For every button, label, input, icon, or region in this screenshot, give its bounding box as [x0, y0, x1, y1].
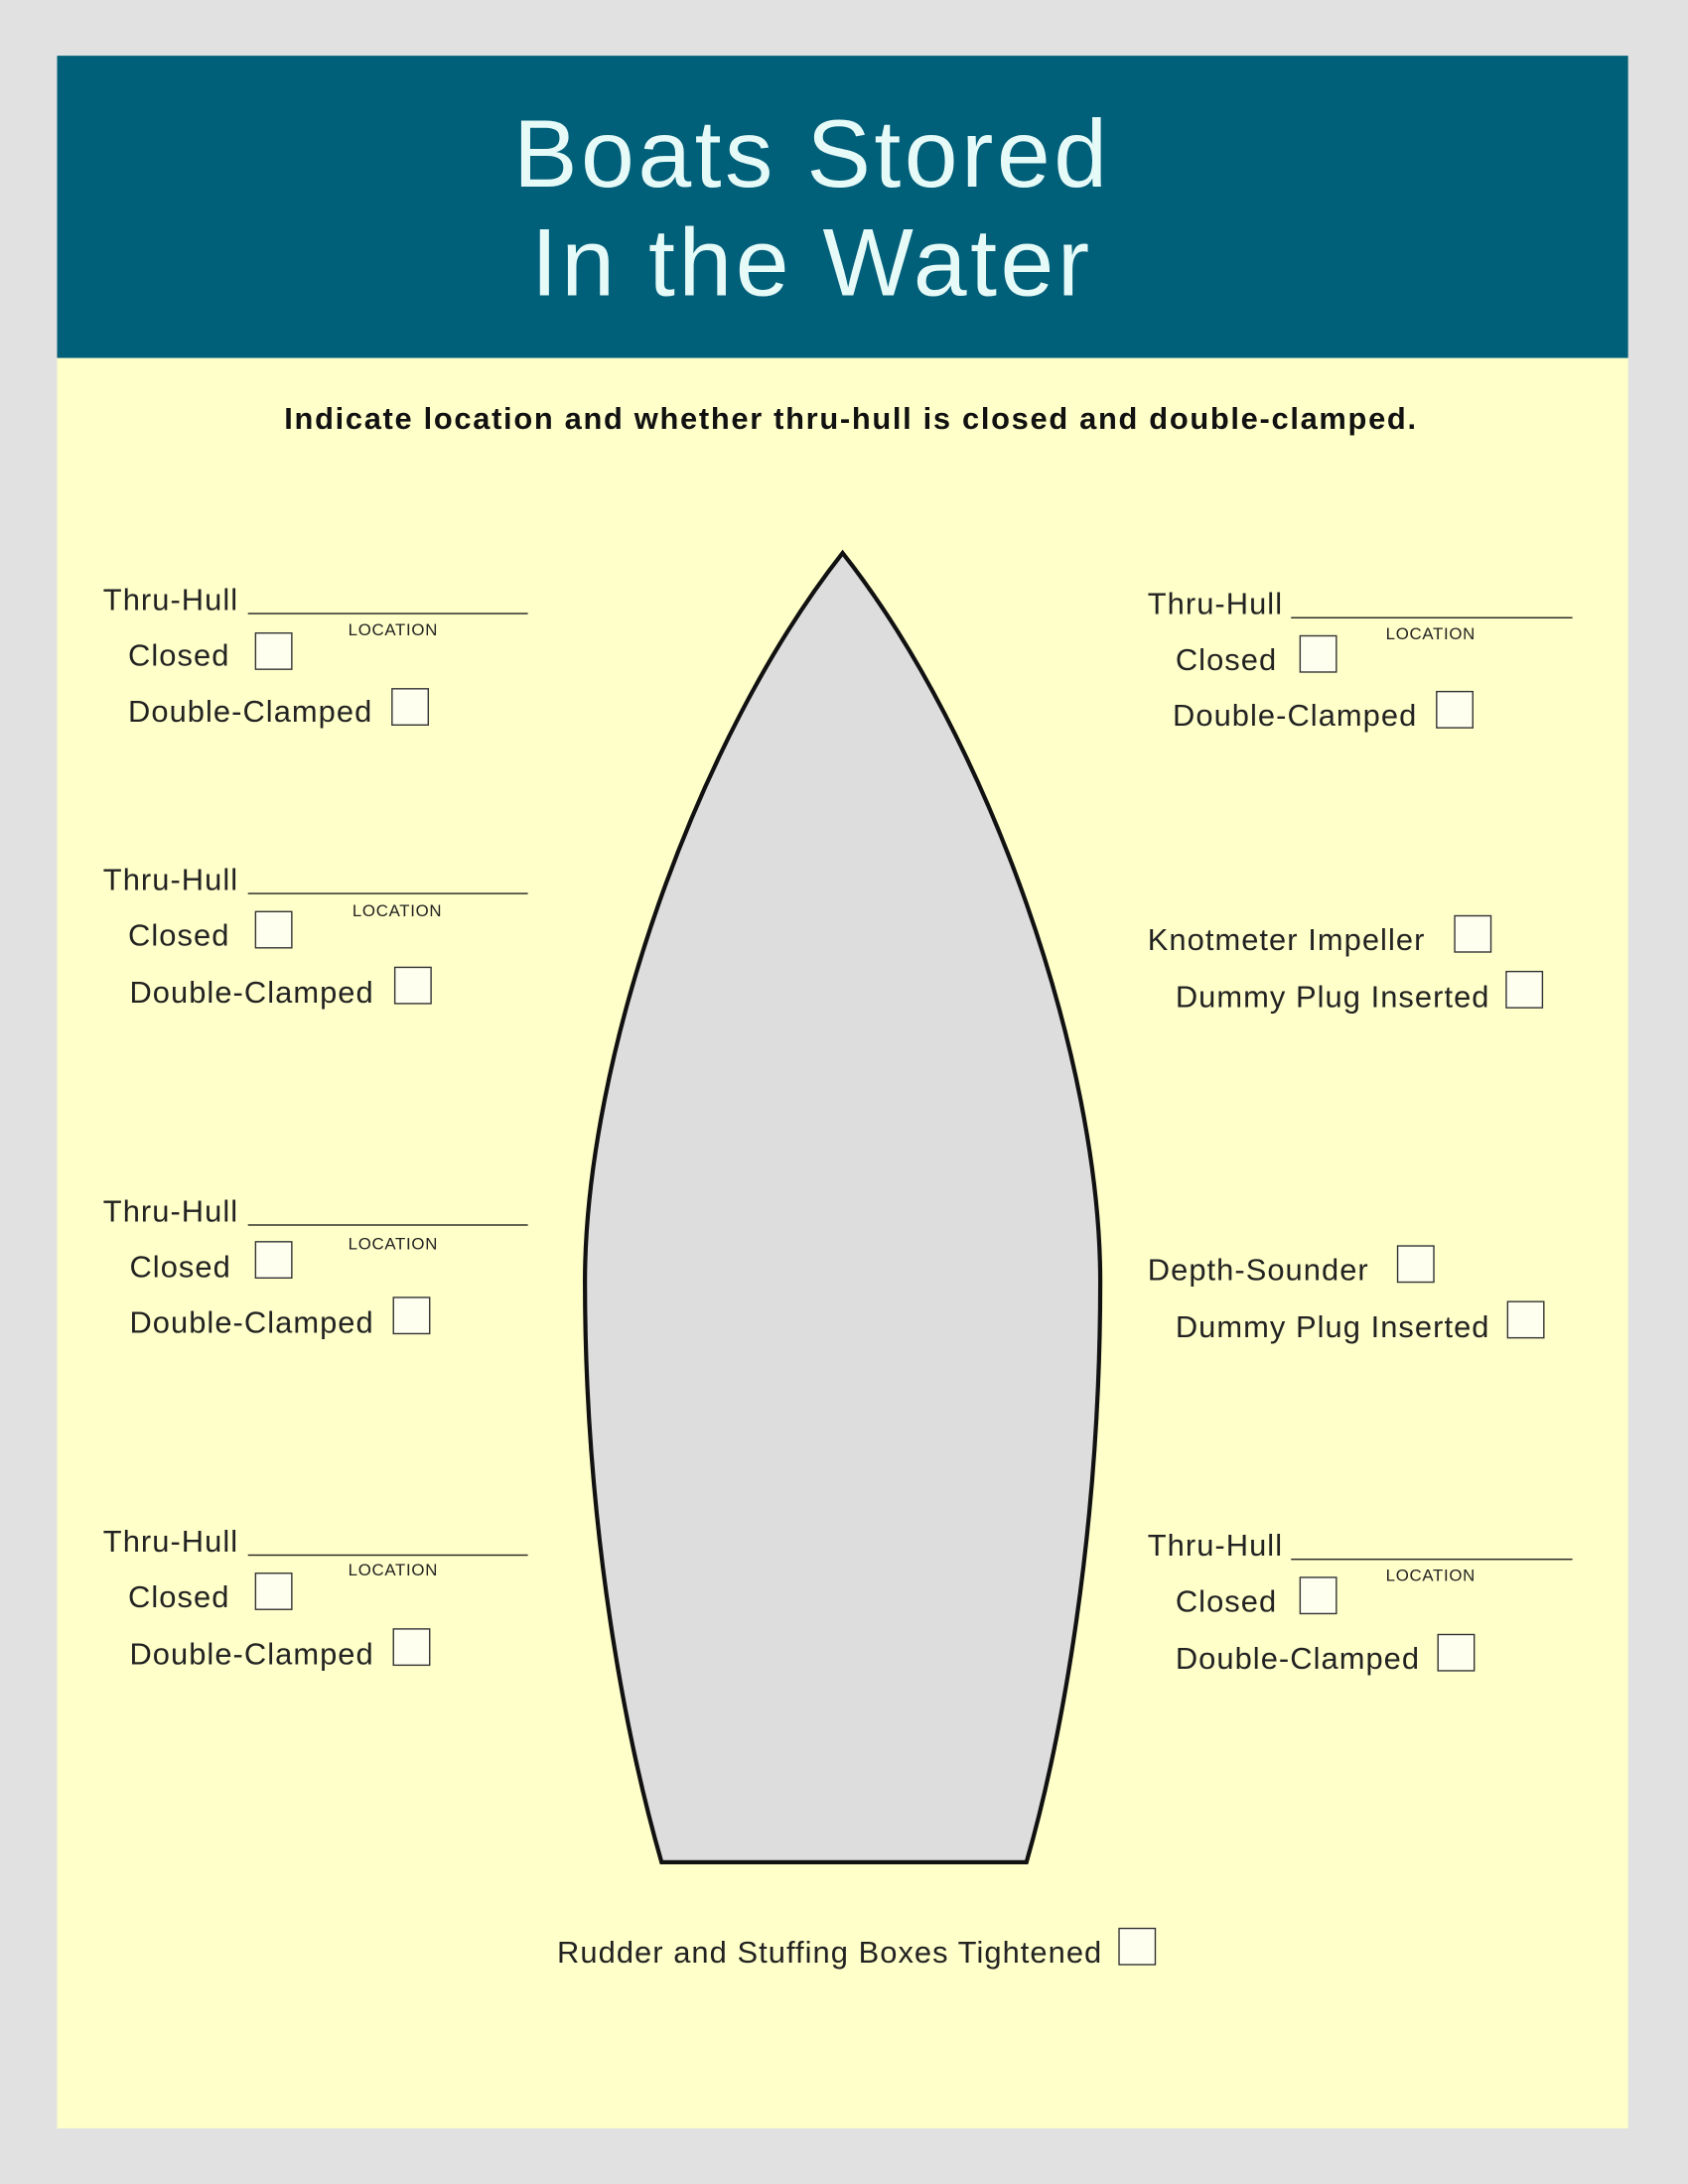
left block 2: Double-Clamped — [129, 975, 374, 1010]
right: depth-sounder: Depth-Sounder — [1148, 1252, 1369, 1287]
right block 1 — [1148, 587, 1573, 733]
left block 3: Closed — [129, 1250, 231, 1285]
right block 4: Thru-Hull — [1148, 1528, 1283, 1563]
left block 4: Double-Clamped — [129, 1637, 374, 1672]
right block 1: Thru-Hull — [1148, 587, 1283, 621]
left block 4: LOCATION — [349, 1560, 438, 1579]
left block 4 — [103, 1524, 528, 1672]
right: knotmeter impeller: Dummy Plug Inserted — [1176, 979, 1490, 1014]
title: In the Water — [531, 208, 1093, 316]
left block 1: Closed — [128, 638, 229, 673]
right block 1: Closed — [1176, 642, 1277, 677]
left block 1: Thru-Hull — [103, 582, 238, 617]
subtitle: Indicate location and whether thru-hull is closed and double-clamped. — [284, 401, 1418, 436]
left block 2: Thru-Hull — [103, 862, 238, 897]
right block 1: Double-Clamped — [1173, 698, 1417, 733]
left block 3 — [103, 1193, 528, 1340]
right: knotmeter impeller — [1148, 915, 1543, 1014]
left block 3: Double-Clamped — [129, 1305, 374, 1340]
left block 1: Double-Clamped — [128, 694, 372, 729]
left block 4: Closed — [128, 1579, 229, 1614]
right block 4 — [1148, 1528, 1573, 1676]
left block 2: Closed — [128, 918, 229, 953]
header banner — [58, 56, 1628, 358]
title: Boats Stored — [513, 100, 1111, 207]
right block 4: LOCATION — [1386, 1566, 1476, 1585]
right: depth-sounder: Dummy Plug Inserted — [1176, 1309, 1490, 1344]
left block 1 — [103, 582, 528, 729]
right block 4: Closed — [1176, 1583, 1277, 1618]
left block 3: LOCATION — [349, 1234, 438, 1254]
right block 4: Double-Clamped — [1176, 1641, 1420, 1676]
left block 3: Thru-Hull — [103, 1193, 238, 1228]
title — [513, 100, 1111, 316]
left block 2 — [103, 862, 528, 1010]
left block 2: LOCATION — [352, 901, 442, 920]
rudder checkbox row: Rudder and Stuffing Boxes Tightened — [557, 1935, 1102, 1970]
left block 4: Thru-Hull — [103, 1524, 238, 1559]
right block 1: LOCATION — [1386, 624, 1476, 643]
right: depth-sounder — [1148, 1245, 1545, 1344]
left block 1: LOCATION — [349, 619, 438, 639]
right: knotmeter impeller: Knotmeter Impeller — [1148, 922, 1425, 957]
